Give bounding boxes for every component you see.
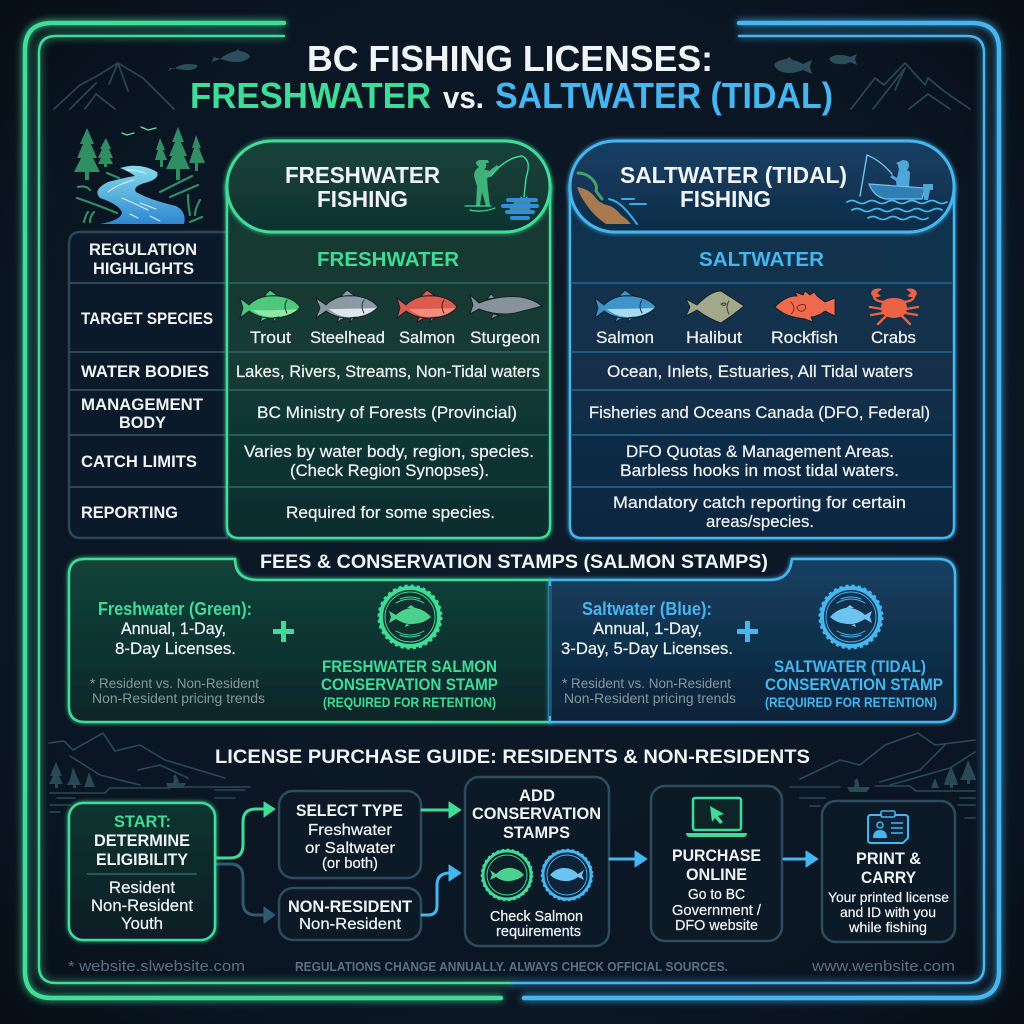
step box: add conservation stamps: CONSERVATION (472, 804, 601, 823)
row label: target species: TARGET SPECIES (81, 310, 213, 328)
icon: steelhead (316, 290, 378, 322)
row label: regulation highlights: HIGHLIGHTS (93, 259, 194, 278)
fees panel: saltwater half: SALTWATER (TIDAL) (774, 657, 926, 676)
fees panel: saltwater half: * Resident vs. Non-Resident (562, 676, 731, 691)
step box: non-resident: NON-RESIDENT (288, 897, 413, 916)
species labels (596, 328, 916, 347)
icon: sturgeon (470, 294, 542, 319)
purchase guide heading: LICENSE PURCHASE GUIDE: RESIDENTS & NON-RESIDENTS (215, 746, 810, 768)
species labels: Rockfish (771, 328, 838, 347)
step box: start determine eligibility: ELIGIBILITY (96, 850, 189, 869)
freshwater header pill: FRESHWATER (285, 162, 440, 188)
step box: select type (279, 791, 421, 878)
arrow: start to select type (216, 802, 275, 858)
step box: purchase online: ONLINE (686, 865, 747, 884)
step box: start determine eligibility: Youth (121, 914, 163, 933)
fees panel: saltwater half (550, 559, 955, 722)
species labels (250, 328, 540, 347)
species labels: Trout (250, 328, 291, 347)
footer: right website: www.wenbsite.com (811, 958, 955, 975)
icon: halibut (686, 291, 744, 323)
catch limits value: DFO Quotas & Management Areas. (626, 442, 894, 461)
step box: print and carry: CARRY (861, 868, 917, 887)
decoration: top-right fish and mountains (774, 54, 970, 109)
row label: catch limits: CATCH LIMITS (81, 453, 197, 471)
row label: regulation highlights: REGULATION (89, 240, 197, 259)
reporting value: areas/species. (706, 512, 814, 531)
icon: coastline (577, 173, 646, 224)
title: FRESHWATER (190, 75, 431, 116)
fees panel: freshwater half: * Resident vs. Non-Resident (90, 676, 259, 691)
arrow: purchase to print (784, 851, 818, 867)
step box: start determine eligibility: Non-Resident (91, 896, 193, 915)
step box: non-resident (279, 888, 421, 940)
fees panel: saltwater half: Non-Resident pricing trends (564, 691, 736, 706)
icon: id card (868, 811, 908, 843)
icon: salmon (397, 290, 457, 322)
catch limits value: Varies by water body, region, species. (244, 442, 534, 461)
panel: regulation highlights column (69, 232, 227, 538)
fees panel: freshwater half (69, 559, 550, 722)
step box: print and carry: PRINT & (856, 849, 921, 868)
step box: start determine eligibility (69, 803, 215, 940)
icon: plus (273, 621, 294, 642)
row label: water bodies: WATER BODIES (81, 363, 209, 381)
title: vs. (443, 80, 484, 115)
outer frame: green side (25, 23, 512, 998)
icon: trout (240, 290, 300, 322)
step box: start determine eligibility: DETERMINE (94, 831, 190, 850)
step box: select type: SELECT TYPE (296, 802, 403, 820)
step box: add conservation stamps (465, 777, 609, 946)
icon: green stamp (482, 850, 532, 900)
reporting value: Required for some species. (286, 503, 495, 522)
icon: saltwater stamp (820, 586, 882, 648)
step box: add conservation stamps: Check Salmon (490, 908, 583, 925)
species labels: Sturgeon (470, 328, 540, 347)
freshwater header pill (227, 141, 550, 232)
step box: non-resident: Non-Resident (299, 916, 402, 933)
arrow: stamps to purchase (610, 851, 647, 867)
fees panel: freshwater half: Non-Resident pricing trends (92, 691, 265, 706)
arrow: start to non-resident (216, 864, 275, 923)
step box: start determine eligibility: Resident (109, 878, 175, 897)
title: BC FISHING LICENSES: (307, 38, 713, 79)
freshwater header pill: FISHING (317, 186, 408, 212)
saltwater subheading: SALTWATER (699, 249, 825, 271)
icon: forest and river (74, 127, 205, 224)
species labels: Steelhead (310, 328, 385, 347)
step box: print and carry (822, 801, 955, 942)
fees panel: freshwater half: FRESHWATER SALMON (322, 657, 497, 676)
fees panel: freshwater half: CONSERVATION STAMP (321, 675, 498, 694)
icon: laptop (686, 798, 747, 837)
fees panel: freshwater half: 8-Day Licenses. (115, 639, 236, 658)
catch limits value (620, 442, 899, 480)
step box: purchase online: PURCHASE (672, 846, 761, 865)
step box: print and carry: and ID with you (840, 904, 936, 920)
step box: select type: or Saltwater (305, 840, 396, 857)
freshwater subheading: FRESHWATER (317, 249, 460, 271)
row label: management body: BODY (119, 414, 166, 432)
icon: salmon (595, 290, 656, 322)
icon: plus (737, 621, 758, 642)
fees heading: FEES & CONSERVATION STAMPS (SALMON STAMPS) (260, 551, 768, 573)
arrow: non-resident to stamps (422, 865, 461, 915)
outer frame: blue side (512, 23, 999, 998)
footer: disclaimer: REGULATIONS CHANGE ANNUALLY. ALWAYS CHECK OFFICIAL SOURCES. (295, 960, 728, 974)
panel: saltwater column (570, 141, 954, 538)
catch limits value: (Check Region Synopses). (290, 461, 489, 480)
title: SALTWATER (TIDAL) (495, 75, 833, 116)
icon: blue stamp (542, 850, 592, 900)
catch limits value: Barbless hooks in most tidal waters. (620, 461, 899, 480)
step box: add conservation stamps: STAMPS (503, 823, 570, 842)
step box: purchase online: Go to BC (688, 886, 745, 903)
step box: select type: (or both) (322, 856, 378, 872)
step box: print and carry: Your printed license (828, 889, 949, 905)
catch limits value (244, 442, 534, 480)
species labels: Crabs (871, 328, 916, 347)
species labels: Salmon (399, 328, 455, 347)
panel: fees and conservation stamps (69, 551, 955, 722)
decoration: lower-left landscape (49, 733, 250, 812)
fees panel: saltwater half: CONSERVATION STAMP (765, 675, 943, 694)
row label: management body: MANAGEMENT (81, 396, 203, 414)
saltwater header pill: FISHING (680, 186, 771, 212)
icon: crab (870, 289, 918, 324)
step box: purchase online (651, 786, 782, 941)
fees panel: freshwater half: Annual, 1-Day, (121, 619, 226, 638)
water bodies value: Lakes, Rivers, Streams, Non-Tidal waters (236, 362, 540, 381)
title (190, 38, 833, 116)
reporting value: Mandatory catch reporting for certain (613, 493, 906, 512)
arrow: select type to stamps (422, 802, 461, 818)
fees panel: saltwater half: Saltwater (Blue): (582, 599, 712, 619)
step box: print and carry: while fishing (848, 919, 927, 935)
reporting value (613, 493, 906, 531)
fees panel: freshwater half: (REQUIRED FOR RETENTION) (323, 695, 496, 710)
fees panel: saltwater half: 3-Day, 5-Day Licenses. (561, 639, 733, 658)
row label: reporting: REPORTING (81, 504, 178, 522)
step box: add conservation stamps: requirements (496, 923, 581, 940)
species labels: Halibut (686, 328, 742, 347)
water bodies value: Ocean, Inlets, Estuaries, All Tidal waters (607, 362, 913, 381)
management body value: BC Ministry of Forests (Provincial) (257, 403, 517, 422)
step box: start determine eligibility: START: (114, 812, 171, 831)
icon: rockfish (775, 291, 835, 322)
step box: purchase online: DFO website (675, 917, 758, 934)
decoration: lower-right landscape (790, 733, 976, 818)
step box: add conservation stamps: ADD (519, 786, 555, 805)
management body value: Fisheries and Oceans Canada (DFO, Federal) (589, 403, 930, 422)
step box: select type: Freshwater (308, 822, 393, 839)
icon: freshwater angler (465, 156, 537, 218)
footer: left website: * website.slwebsite.com (68, 958, 245, 975)
fees panel: saltwater half: (REQUIRED FOR RETENTION) (765, 695, 937, 710)
row label: regulation highlights (89, 240, 197, 278)
saltwater header pill (570, 141, 954, 232)
fees panel: freshwater half: Freshwater (Green): (98, 599, 252, 619)
decoration: top-left mountains and fish (54, 49, 250, 109)
panel: freshwater column (227, 141, 550, 538)
saltwater header pill: SALTWATER (TIDAL) (620, 162, 847, 188)
fees panel: saltwater half: Annual, 1-Day, (593, 619, 702, 638)
row label: management body (81, 396, 203, 432)
step box: purchase online: Government / (672, 902, 762, 919)
icon: boat angler (847, 155, 947, 220)
icon: freshwater stamp (378, 586, 442, 648)
species labels: Salmon (596, 328, 654, 347)
